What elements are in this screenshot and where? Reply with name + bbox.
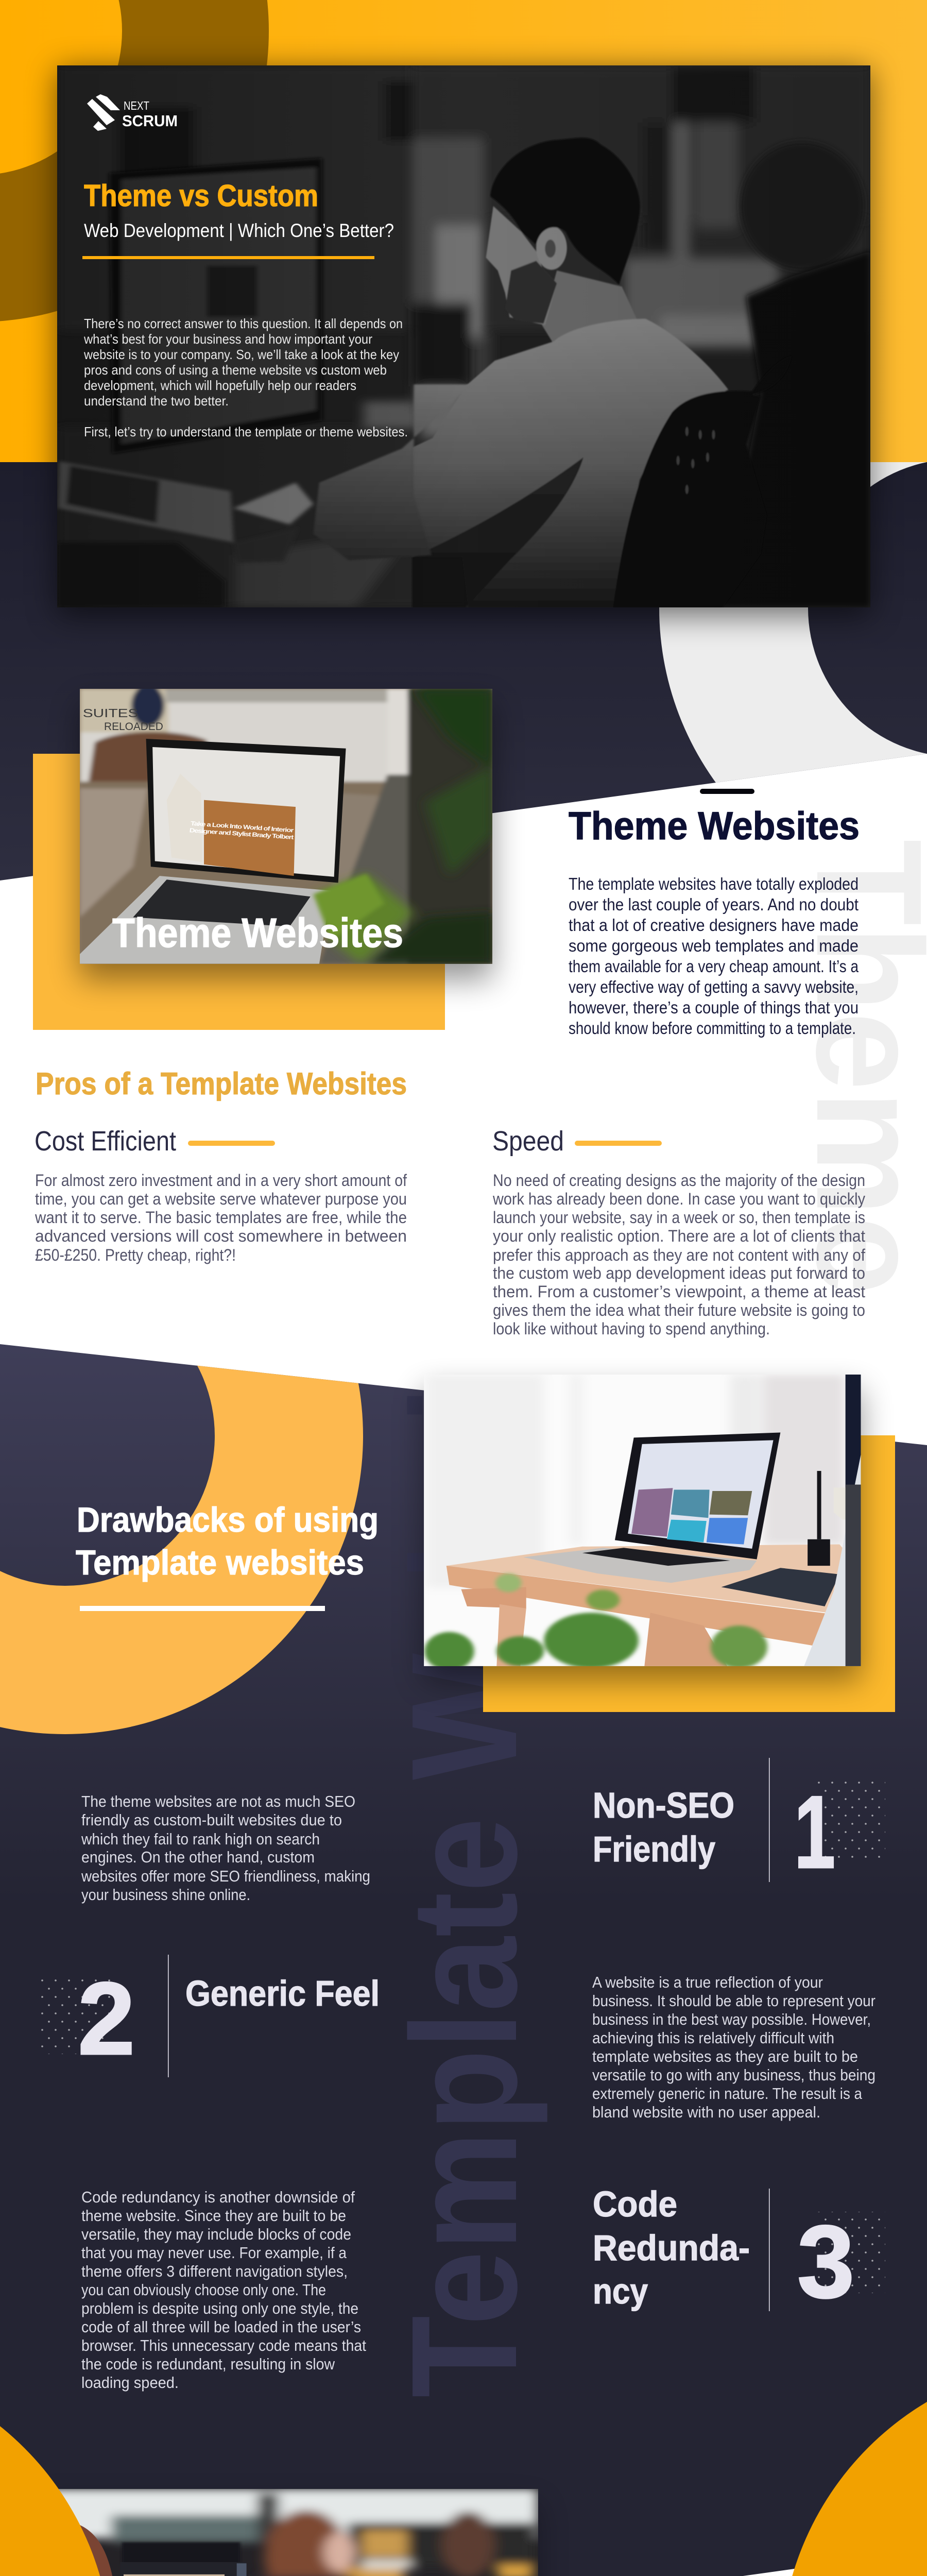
Speed text	[492, 1171, 865, 1338]
hero intro text: development, which will hopefully help our readers	[84, 378, 356, 393]
navy band behind hero	[0, 462, 927, 880]
section title: Drawbacks of using Template websites: Template websites	[76, 1543, 364, 1582]
item 3 text: code redundancy: browser. This unnecessary code means that	[81, 2336, 366, 2354]
intro paragraph: them available for a very cheap amount. It’s a	[569, 957, 859, 976]
item 2 text: reflection of business: achieving this is relatively difficult with	[592, 2029, 834, 2047]
logo: Next Scrum: SCRUM	[122, 112, 178, 130]
section title: Drawbacks of using Template websites	[76, 1500, 379, 1611]
intro paragraph: that a lot of creative designers have made	[569, 916, 859, 935]
photo: laptop with website: Designer and Stylist Brady Tolbert	[189, 827, 295, 841]
item 3 text: code redundancy: you can obviously choose only one. The	[81, 2281, 326, 2299]
yellow pill	[575, 1141, 662, 1146]
item 3 text: code redundancy: theme offers 3 different navigation styles,	[81, 2262, 348, 2280]
Speed text: them. From a customer’s viewpoint, a theme at least	[493, 1282, 865, 1301]
heading: Pros of a Template Websites: Pros of a Template Websites	[36, 1066, 407, 1101]
hero title: Theme vs Custom	[84, 179, 318, 213]
item 2 header: Generic Feel: 2	[78, 1961, 135, 2076]
item 2 text: reflection of business: extremely generic in nature. The result is a	[592, 2084, 863, 2103]
Speed text: launch your website, say in a week or so, then template is	[493, 1208, 865, 1227]
intro paragraph: The template websites have totally exploded	[569, 874, 859, 893]
Speed text: look like without having to spend anything.	[493, 1319, 770, 1338]
item 3 text: code redundancy: Code redundancy is another downside of	[81, 2188, 355, 2206]
photo: laptop with website: RELOADED	[104, 721, 163, 733]
item 1 text: SEO: your business shine online.	[81, 1886, 250, 1904]
photo caption: Theme Websites: Theme Websites	[112, 910, 403, 956]
logo: Next Scrum	[87, 94, 178, 131]
Speed text: gives them the idea what their future website is going to	[493, 1301, 865, 1319]
orange circle right	[780, 2360, 927, 2576]
item 3 text: code redundancy	[81, 2188, 366, 2392]
item 2 text: reflection of business: template websites as they are built to be	[592, 2047, 858, 2065]
intro paragraph: however, there’s a couple of things that you	[569, 998, 859, 1017]
laptop photo shadow	[80, 704, 492, 979]
item 2 text: reflection of business	[592, 1973, 876, 2121]
pale ring on navy band	[659, 462, 927, 783]
item 3 text: code redundancy: loading speed.	[81, 2374, 179, 2392]
rotated watermark: Template Websites: Template Websites	[380, 1192, 549, 2398]
item 3 header: Code Redundancy: Redunda-	[593, 2228, 750, 2268]
office photo shadow	[31, 2504, 538, 2576]
yellow pill	[188, 1141, 275, 1146]
item 3 header: Code Redundancy: ncy	[593, 2271, 648, 2311]
Cost Efficient text: £50-£250. Pretty cheap, right?!	[35, 1246, 236, 1264]
subheading: Cost Efficient: Cost Efficient	[35, 1126, 176, 1157]
panel: hero photo with intro	[57, 64, 870, 608]
yellow block behind desk photo	[483, 1435, 895, 1712]
panel: Speed	[492, 1126, 865, 1338]
item 1 header: Non-SEO Friendly: 1	[794, 1775, 835, 1890]
photo: designer at laptop with flowers	[59, 2489, 538, 2576]
item 1 text: SEO: which they fail to rank high on search	[81, 1830, 320, 1848]
subheading: Speed: Speed	[492, 1126, 564, 1157]
yellow ring	[0, 1365, 363, 1734]
hero orange rule	[82, 256, 374, 259]
Speed text: work has already been done. In case you want to quickly	[492, 1190, 865, 1208]
photo: laptop on wooden desk	[424, 1375, 861, 1670]
item 3 text: code redundancy: theme website. Since they are built to be	[81, 2207, 346, 2225]
intro paragraph: some gorgeous web templates and made	[569, 936, 859, 955]
item 1 text: SEO: friendly as custom-built websites due to	[81, 1811, 342, 1829]
desk photo shadow	[424, 1390, 861, 1682]
Cost Efficient text: time, you can get a website serve whatever purpose you	[35, 1190, 407, 1208]
item 3 text: code redundancy: code of all three will be loaded in the user’s	[81, 2318, 361, 2336]
item 2 text: reflection of business: business in the best way possible. However,	[592, 2010, 871, 2028]
photo: laptop with website: SUITES	[83, 706, 138, 720]
hero drop shadow	[57, 70, 870, 616]
item 3 text: code redundancy: problem is despite using only one style, the	[81, 2299, 358, 2317]
Speed text: No need of creating designs as the majority of the design	[493, 1171, 865, 1190]
item 2 text: reflection of business: versatile to go with any business, thus being	[592, 2066, 876, 2084]
intro paragraph	[569, 874, 859, 1038]
logo: Next Scrum: NEXT	[124, 99, 149, 112]
Cost Efficient text	[35, 1171, 407, 1264]
item 2 text: reflection of business: A website is a true reflection of your	[592, 1973, 823, 1991]
panel: Theme Websites intro	[569, 789, 860, 1038]
Speed text: prefer this approach as they are not content with any of	[493, 1246, 865, 1264]
item 2 header: Generic Feel	[41, 1955, 380, 2077]
intro paragraph: should know before committing to a template.	[569, 1019, 856, 1038]
Cost Efficient text: advanced versions will cost somewhere in between	[35, 1227, 407, 1245]
item 2 text: reflection of business: business. It should be able to represent your	[592, 1992, 876, 2010]
decorative ring on yellow band	[0, 0, 269, 322]
item 2 text: reflection of business: bland website with no user appeal.	[592, 2103, 820, 2121]
panel: Cost Efficient	[35, 1126, 407, 1264]
hero intro text: First, let’s try to understand the template or theme websites.	[84, 424, 408, 439]
item 3 text: code redundancy: the code is redundant, resulting in slow	[81, 2355, 335, 2373]
intro paragraph: over the last couple of years. And no doubt	[569, 895, 859, 914]
item 1 header: Non-SEO Friendly: Non-SEO	[593, 1785, 734, 1825]
heading: Theme Websites: Theme Websites	[569, 804, 860, 848]
hero photo: man at desk	[57, 64, 870, 608]
short black rule	[700, 789, 754, 794]
hero intro text: There’s no correct answer to this question. It all depends on	[84, 316, 403, 331]
item 3 text: code redundancy: that you may never use. For example, if a	[81, 2244, 347, 2262]
yellow block behind laptop photo	[33, 754, 445, 1030]
item 3 header: Code Redundancy: Code	[593, 2184, 677, 2224]
item 1 text: SEO: websites offer more SEO friendliness, making	[81, 1867, 370, 1885]
item 1 text: SEO	[81, 1792, 370, 1904]
item 3 header: Code Redundancy	[593, 2184, 885, 2319]
Speed text: your only realistic option. There are a lot of clients that	[493, 1227, 865, 1245]
hero subtitle: Web Development | Which One’s Better?	[84, 220, 394, 241]
item 1 header: Non-SEO Friendly: Friendly	[593, 1829, 715, 1869]
hero intro text: website is to your company. So, we’ll take a look at the key	[83, 347, 399, 362]
hero intro text: pros and cons of using a theme website vs custom web	[84, 362, 387, 378]
item 1 header: Non-SEO Friendly	[593, 1758, 885, 1890]
item 3 text: code redundancy: versatile, they may include blocks of code	[81, 2225, 351, 2243]
item 1 text: SEO: The theme websites are not as much SEO	[81, 1792, 355, 1810]
item 2 header: Generic Feel: Generic Feel	[185, 1973, 380, 2013]
hero intro text: understand the two better.	[84, 393, 229, 409]
Cost Efficient text: For almost zero investment and in a very short amount of	[35, 1171, 407, 1190]
navy section: drawbacks	[0, 1344, 927, 2576]
photo: laptop with website: Take a Look Into World of Interior	[190, 820, 294, 834]
item 3 header: Code Redundancy: 3	[797, 2205, 854, 2319]
orange circle left	[0, 2361, 112, 2576]
photo: laptop with website	[80, 685, 492, 965]
section title: Drawbacks of using Template websites: Drawbacks of using	[77, 1500, 379, 1539]
intro paragraph: very effective way of getting a savvy website,	[569, 977, 859, 996]
white rule	[80, 1606, 325, 1611]
hero intro text	[83, 316, 408, 439]
Speed text: the custom web app development ideas put forward to	[493, 1264, 865, 1282]
Cost Efficient text: want it to serve. The basic templates are free, while the	[35, 1208, 407, 1227]
yellow header band	[0, 0, 927, 462]
item 1 text: SEO: engines. On the other hand, custom	[81, 1848, 315, 1866]
hero intro text: what’s best for your business and how important your	[83, 331, 372, 347]
